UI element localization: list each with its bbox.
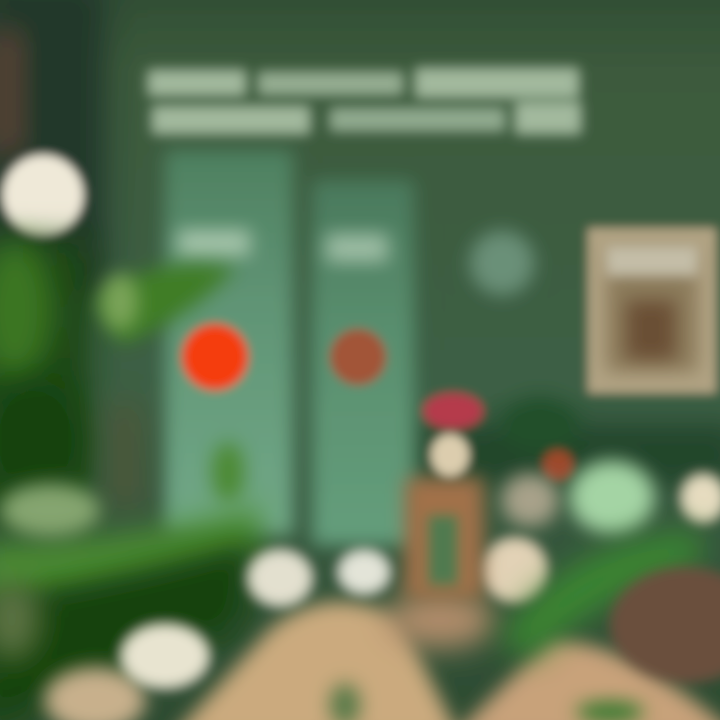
left plant	[0, 240, 260, 720]
picture frame	[588, 228, 716, 393]
heading: blurred title	[148, 68, 581, 134]
panel heading blur	[326, 234, 388, 262]
panel heading blur	[178, 230, 250, 256]
panel: left column	[165, 150, 293, 535]
floor: beige ground	[45, 592, 720, 720]
white flowers	[121, 474, 720, 688]
brown bowl bottom right	[610, 567, 720, 683]
icon: bright red circle	[182, 324, 248, 390]
panel: right faint circle	[470, 231, 534, 295]
right plant	[500, 397, 700, 660]
lamp with stem	[0, 30, 83, 235]
panel: middle column	[312, 180, 414, 545]
centre vase with flower	[405, 393, 483, 598]
icon: muted red circle	[330, 329, 386, 385]
